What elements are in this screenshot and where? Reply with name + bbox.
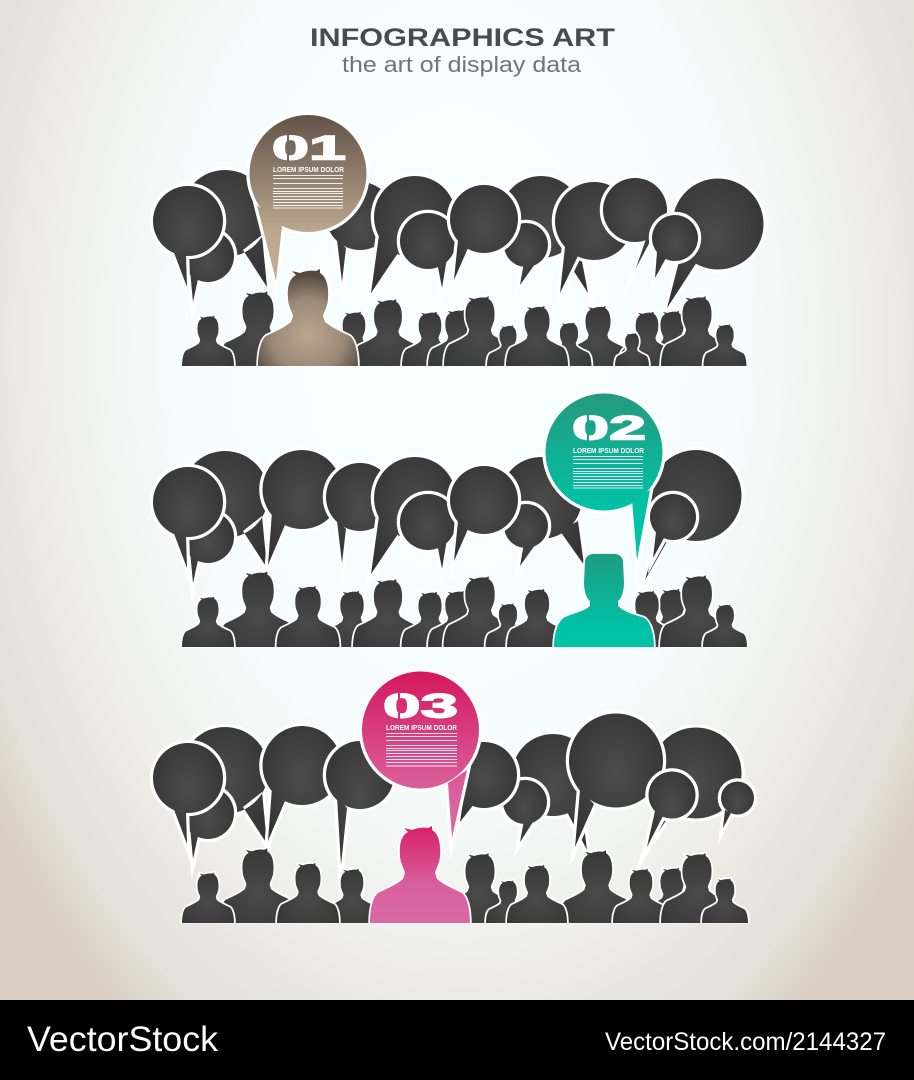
footer bar bbox=[0, 1000, 914, 1080]
number 02: 02 bbox=[572, 410, 646, 448]
highlighted person 01 bbox=[258, 269, 358, 366]
panel: group 01 conversation bbox=[153, 115, 764, 366]
highlighted person 03 bbox=[370, 826, 470, 923]
caption lines 03 bbox=[386, 734, 457, 766]
caption heading 01: LOREM IPSUM DOLOR bbox=[273, 167, 344, 174]
crowd row 3 bbox=[182, 848, 748, 923]
crowd row 2 bbox=[182, 571, 747, 647]
caption heading 03: LOREM IPSUM DOLOR bbox=[386, 725, 457, 732]
panel: group 03 conversation bbox=[153, 672, 754, 923]
highlighted person 02 bbox=[554, 554, 654, 647]
speech bubbles row 1 bbox=[153, 170, 764, 308]
crowd row 1 bbox=[182, 291, 746, 366]
caption heading 02: LOREM IPSUM DOLOR bbox=[573, 448, 644, 455]
speech bubbles row 2 bbox=[153, 450, 742, 583]
speech bubbles row 3 bbox=[153, 714, 754, 865]
panel: group 02 conversation bbox=[153, 394, 747, 647]
subtitle: the art of display data bbox=[342, 52, 582, 77]
number 03: 03 bbox=[383, 688, 458, 726]
highlighted bubble 03 bbox=[362, 672, 479, 838]
watermark url: VectorStock.com/2144327 bbox=[605, 1028, 886, 1056]
title: INFOGRAPHICS ART bbox=[310, 24, 615, 52]
caption lines 02 bbox=[573, 456, 643, 488]
number 01: 01 bbox=[272, 130, 346, 168]
highlighted bubble 01 bbox=[250, 115, 366, 281]
highlighted bubble 02 bbox=[546, 394, 662, 560]
caption lines 01 bbox=[273, 176, 343, 208]
watermark logo: VectorStock bbox=[27, 1020, 219, 1059]
